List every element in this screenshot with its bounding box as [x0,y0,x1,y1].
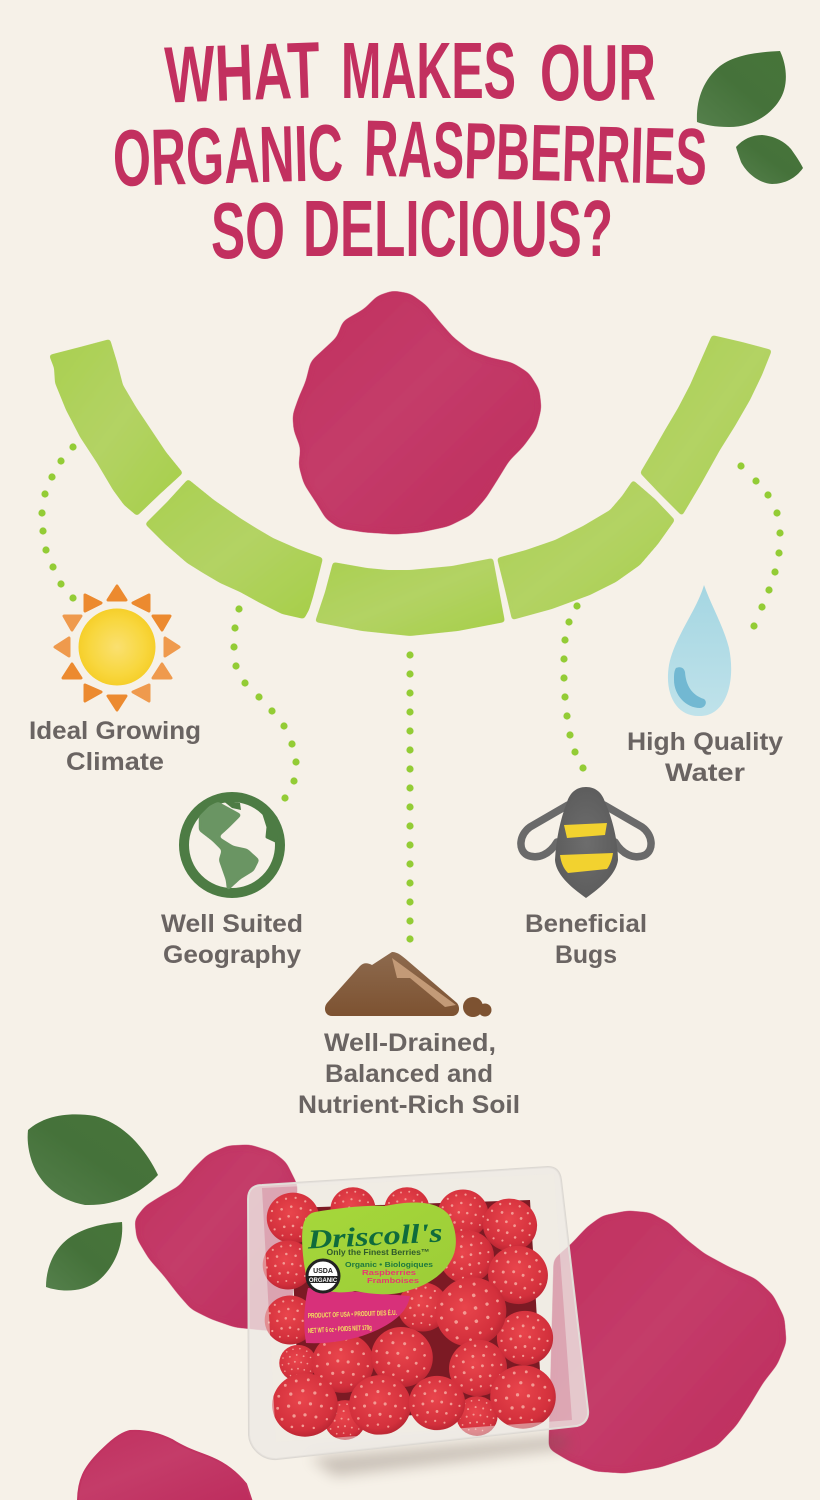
icon: leaves top right [697,51,803,184]
green arc segments [49,335,772,636]
title: OUR [540,28,656,117]
raspberries [263,1187,556,1440]
dotted line: climate [38,443,77,602]
title: DELICIOUS? [303,184,613,273]
label: water: Water [665,759,745,787]
label text [306,1217,443,1285]
label: climate: Climate [66,748,164,776]
label fine print [308,1308,397,1335]
USDA organic seal [307,1260,339,1292]
label: water [627,728,783,787]
icon: water drop [668,585,731,716]
icon: leaves bottom left [28,1114,158,1291]
label: bugs: Bugs [555,941,617,969]
label: soil [298,1029,520,1119]
label fine print: NET WT 6 oz • POIDS NET 170g [308,1325,372,1335]
dotted line: bugs [560,602,587,772]
label text: Driscoll's [306,1217,443,1255]
icon: bee [521,787,651,898]
label text: Only the Finest Berries™ [326,1247,430,1257]
segment 4 [497,480,675,620]
icon: soil pile [325,952,492,1017]
icon: globe [184,797,280,893]
USDA organic seal: USDA [313,1268,333,1275]
label: soil: Well-Drained, [324,1029,496,1057]
label text: Organic • Biologiques [345,1260,433,1269]
label: geography: Well Suited [161,910,303,938]
title: ORGANIC [112,108,344,203]
segment 2 [145,479,323,619]
product label green [302,1203,456,1294]
segment 3 [315,558,505,636]
label text: Raspberries [362,1268,416,1277]
segment 5 [640,335,772,516]
raspberry blob bottom [78,1431,252,1500]
label: climate: Ideal Growing [29,717,201,745]
title: MAKES [341,26,516,115]
raspberry blob right [550,1212,785,1472]
label: bugs [525,910,647,969]
label: soil: Balanced and [325,1060,493,1088]
dotted line: water [737,462,784,630]
dark berry bed [290,1200,542,1424]
raspberry package [248,1167,588,1476]
label: geography: Geography [163,941,301,969]
label: bugs: Beneficial [525,910,647,938]
label: climate [29,717,201,776]
label: soil: Nutrient-Rich Soil [298,1091,520,1119]
icon: sun [55,586,179,710]
dotted line: soil [406,651,414,943]
package shadow [310,1435,570,1476]
clear plastic tray [248,1167,588,1459]
dotted line: geography [230,605,300,802]
label text: Framboises [367,1276,419,1285]
segment 1 [49,339,183,516]
label fine print: PRODUCT OF USA • PRODUIT DES É.U. [308,1308,397,1320]
title: WHAT [163,25,322,120]
USDA organic seal: ORGANIC [309,1278,338,1284]
title: SO [211,186,285,275]
raspberry blob center [294,292,540,533]
label: geography [161,910,303,969]
raspberry blob left [136,1146,296,1330]
label: water: High Quality [627,728,783,756]
clear lid rim [248,1167,588,1459]
title [112,25,708,275]
product label pink [304,1288,410,1343]
